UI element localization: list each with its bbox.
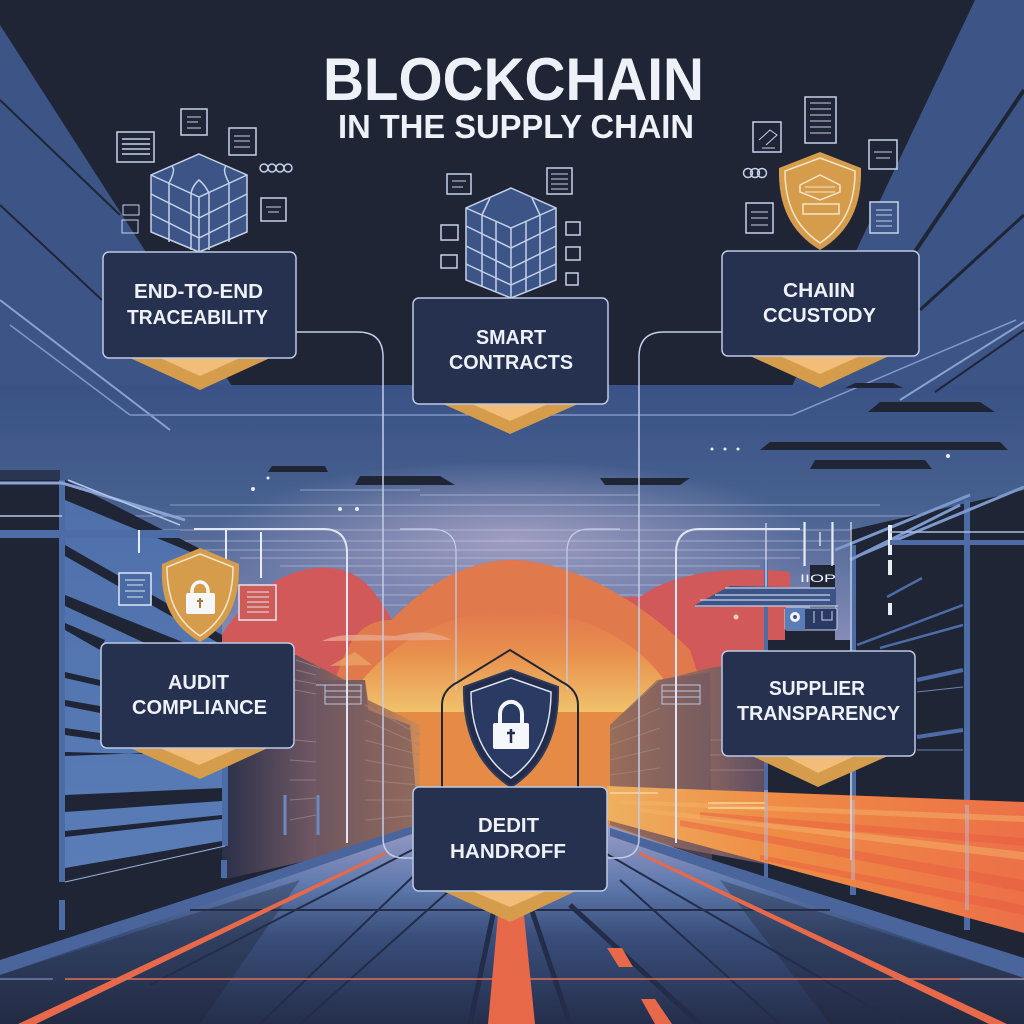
icon: dark lock shield: [464, 670, 558, 787]
warehouse row: left: [222, 655, 420, 880]
title: IN THE SUPPLY CHAIN: [338, 108, 694, 145]
left wall with slats: [0, 470, 225, 965]
card: smart contracts: [413, 298, 608, 434]
card: supplier transparency: TRANSPARENCY: [737, 703, 901, 725]
title: [323, 46, 704, 145]
sunset clouds: [218, 560, 790, 842]
card: smart contracts: CONTRACTS: [449, 352, 573, 374]
card: end-to-end traceability: [103, 252, 296, 390]
right wall with beams: [766, 487, 1024, 950]
floor and road: [0, 826, 1024, 1024]
card: supplier transparency: SUPPLIER: [769, 678, 866, 700]
connector lines: [139, 332, 851, 860]
card: end-to-end traceability: TRACEABILITY: [127, 307, 269, 329]
card: dedit handroff: [413, 787, 607, 922]
card: smart contracts: SMART: [476, 327, 546, 349]
title: BLOCKCHAIN: [323, 46, 704, 113]
card: dedit handroff: DEDIT: [478, 815, 539, 837]
orange light streak: [607, 786, 1024, 933]
card: chain custody: CHAIIN: [783, 280, 855, 302]
warehouse row: right: [610, 640, 860, 880]
card: audit compliance: COMPLIANCE: [132, 697, 267, 719]
card: supplier transparency: [722, 651, 915, 787]
card: end-to-end traceability: END-TO-END: [134, 281, 263, 303]
icon: left blockchain cube with documents: [117, 109, 292, 252]
icon: supplier device: [695, 522, 838, 643]
icon: supplier device: IIOP: [800, 573, 836, 585]
icon: gold lock shield with documents: [119, 548, 276, 642]
card: chain custody: [722, 251, 919, 388]
card: audit compliance: AUDIT: [168, 672, 229, 694]
card: dedit handroff: HANDROFF: [450, 841, 566, 863]
icon: gold shield with documents: [744, 97, 898, 250]
card: chain custody: CCUSTODY: [763, 305, 877, 327]
card: audit compliance: [101, 643, 294, 779]
background: ceiling and perspective panels: [0, 0, 1024, 650]
icon: center blockchain cube with documents: [441, 168, 580, 298]
